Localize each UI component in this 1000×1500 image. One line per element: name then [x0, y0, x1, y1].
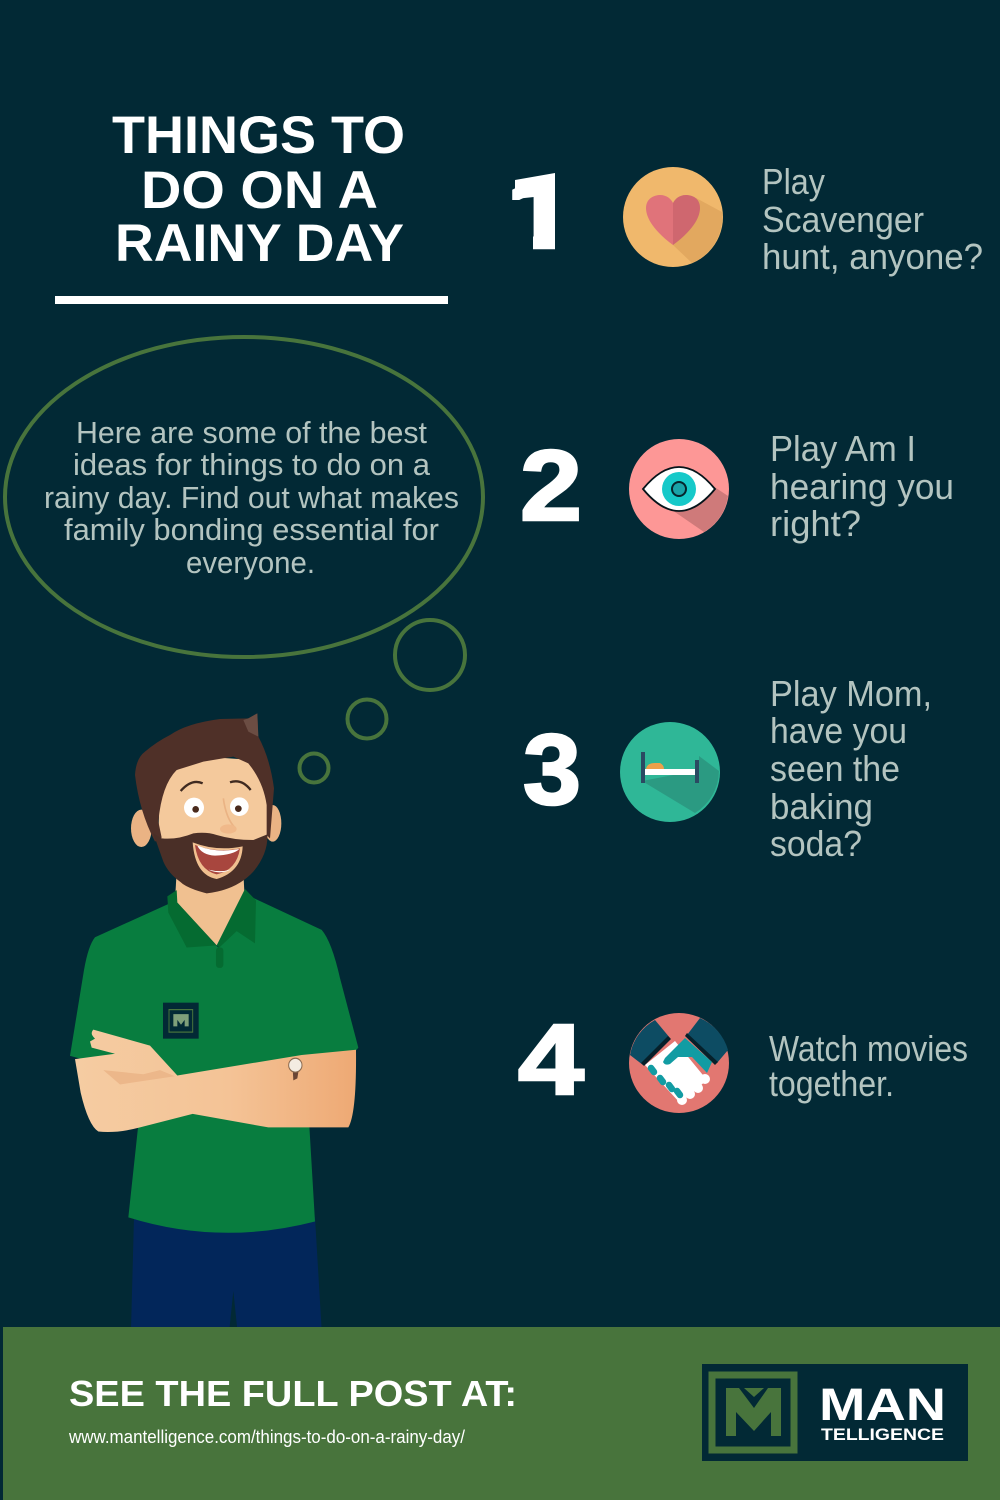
logo: TELLIGENCE — [821, 1425, 944, 1444]
item 3: soda? — [770, 823, 862, 864]
shirt placket — [216, 947, 223, 968]
item 4: 4 — [518, 1004, 584, 1116]
shirt logo badge — [163, 1003, 199, 1039]
icon: bed — [620, 722, 720, 822]
body — [70, 872, 358, 1330]
item 1: Scavenger — [762, 199, 924, 240]
thought bubble — [5, 337, 483, 782]
thought bubble: Here are some of the best — [76, 415, 427, 450]
item 1: hunt, anyone? — [762, 236, 983, 277]
item 2: right? — [770, 503, 861, 544]
hair — [135, 713, 274, 842]
thought bubble: ideas for things to do on a — [73, 447, 431, 482]
icon: handshake — [629, 1013, 729, 1113]
title: THINGS TO — [112, 106, 405, 165]
icon: heart — [623, 167, 723, 267]
thought bubble: family bonding essential for — [64, 512, 439, 547]
item 1: Play — [762, 161, 825, 202]
item 2: hearing you — [770, 466, 954, 507]
item 3: 3 — [523, 714, 581, 826]
nose — [220, 798, 237, 834]
wristwatch — [289, 1058, 302, 1080]
item 4 — [518, 1004, 968, 1116]
item 2: Play Am I — [770, 428, 916, 469]
neck — [175, 872, 245, 945]
face — [158, 757, 269, 882]
crossed arms — [75, 1030, 356, 1132]
beard — [153, 833, 267, 893]
item 2 — [520, 428, 954, 544]
title underline — [55, 296, 448, 304]
item 1 — [500, 158, 983, 277]
mouth — [193, 842, 243, 879]
item 3: baking — [770, 786, 873, 827]
footer band — [3, 1327, 1000, 1500]
item 3 — [523, 673, 932, 864]
logo — [702, 1364, 968, 1461]
item 1: 1 — [505, 158, 577, 270]
item 3: have you — [770, 710, 907, 751]
item 4: together. — [769, 1063, 894, 1104]
thought bubble: everyone. — [186, 545, 315, 580]
logo: MAN — [819, 1379, 946, 1430]
item 3: Play Mom, — [770, 673, 932, 714]
trousers — [131, 1217, 322, 1330]
thought bubble: rainy day. Find out what makes — [44, 480, 459, 515]
title: DO ON A — [141, 161, 378, 220]
item 2: 2 — [520, 430, 582, 542]
icon: eye — [629, 439, 729, 539]
eyes — [184, 797, 249, 818]
title — [112, 106, 405, 273]
ears — [131, 805, 281, 847]
footer url: www.mantelligence.com/things-to-do-on-a-rainy-day/ — [68, 1427, 465, 1447]
hair tuft highlight — [243, 713, 258, 737]
eyebrows — [181, 781, 251, 791]
character: bearded man in green polo — [70, 713, 358, 1330]
head — [131, 713, 281, 893]
item 4: Watch movies — [769, 1028, 968, 1069]
footer heading: SEE THE FULL POST AT: — [69, 1373, 517, 1414]
item 3: seen the — [770, 748, 900, 789]
shirt collar — [167, 889, 256, 947]
title: RAINY DAY — [115, 214, 404, 273]
shirt body — [70, 896, 358, 1233]
